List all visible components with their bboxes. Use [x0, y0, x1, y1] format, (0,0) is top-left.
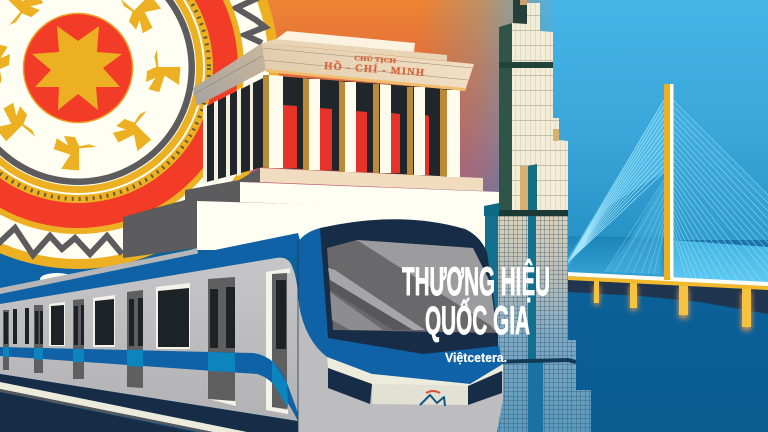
- lower gray nose: [298, 300, 503, 432]
- metro train: [0, 219, 503, 432]
- window frames: [49, 283, 190, 349]
- deck underside shadow: [568, 278, 768, 314]
- brand: Việtcetera: Việtcetera.: [445, 350, 507, 365]
- spire: [513, 0, 527, 24]
- title: [402, 258, 550, 343]
- train front: [298, 219, 503, 432]
- lower sky band: [568, 236, 768, 286]
- doors: [3, 268, 290, 414]
- undercarriage: [0, 374, 300, 432]
- title: THƯƠNG HIỆU: [402, 258, 550, 304]
- upper cream shaft: [484, 3, 568, 216]
- windshield: [320, 219, 498, 354]
- deck: [568, 272, 768, 290]
- title: QUỐC GIA: [425, 297, 530, 343]
- cream strip and face panel: [327, 357, 503, 386]
- roof: [193, 31, 474, 106]
- headlights: [328, 368, 372, 404]
- stripe door highlights: [3, 347, 288, 408]
- bridge: [568, 84, 768, 330]
- windows: [13, 288, 189, 347]
- lower gridded shaft: [485, 216, 591, 432]
- outer zigzag: [0, 0, 265, 255]
- carriage body: [0, 258, 298, 421]
- ground beneath train: [0, 392, 195, 432]
- base steps: [197, 168, 500, 250]
- front edge line: [297, 240, 299, 432]
- blue wrap-around: [298, 225, 503, 384]
- mausoleum: Hồ Chí Minh: [193, 31, 500, 250]
- glowing piers: [594, 278, 751, 330]
- front colonnade: [263, 75, 460, 177]
- side colonnade: [203, 78, 263, 184]
- birds ring: [0, 0, 182, 172]
- blue stripe: [0, 347, 298, 421]
- cable fans: [568, 100, 768, 284]
- gray plinth block: [123, 168, 260, 258]
- pylon: [664, 84, 674, 280]
- roof and clouds: [0, 233, 305, 304]
- medallion: bronze drum emblem: [0, 0, 279, 269]
- tower: Landmark 81: [484, 0, 591, 432]
- background: warm to blue sky: [0, 0, 768, 288]
- inscription: HỒ - CHÍ - MINH: [324, 59, 424, 79]
- metro logo: [420, 391, 445, 406]
- inscription: CHỦ TỊCH: [354, 54, 396, 65]
- red centre with star: [24, 14, 132, 122]
